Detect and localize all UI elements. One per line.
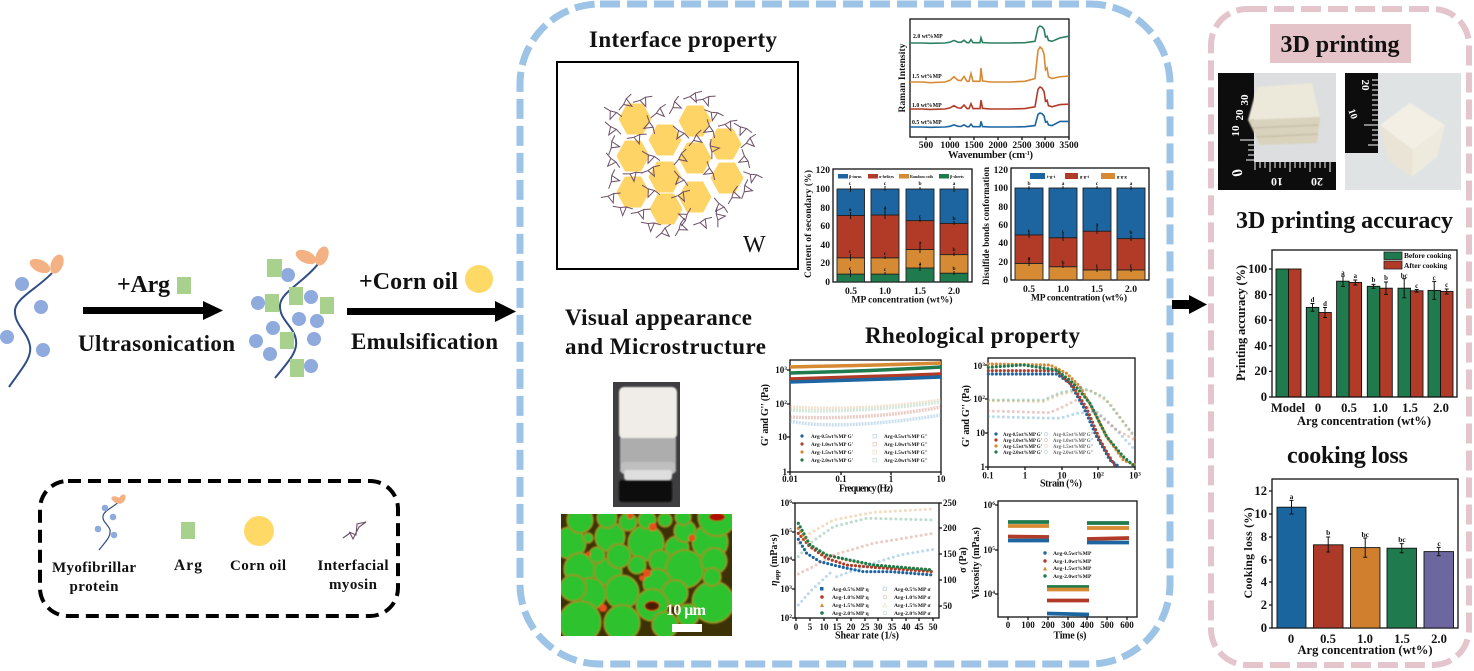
chart: Raman spectra: Raman Intensity: [898, 43, 908, 112]
chart: printing accuracy: 0.5: [1341, 401, 1357, 415]
chart: flow curve: 0: [794, 622, 799, 632]
chart: three-interval thixotropy: 5: [992, 546, 995, 552]
chart: flow curve: 10: [780, 613, 789, 623]
chart: Raman spectra: ): [1030, 150, 1034, 161]
chart: flow curve: 3: [789, 585, 792, 591]
chart: Raman spectra: 1500: [964, 140, 984, 151]
chart: frequency sweep: G' and G'' (Pa): [760, 384, 771, 446]
chart: secondary structure stacked bars: c: [849, 249, 852, 255]
chart: flow curve: 2: [789, 614, 792, 620]
chart: printing accuracy: 0: [1315, 401, 1321, 415]
chart: three-interval thixotropy: 6: [992, 501, 995, 507]
chart: disulfide bond stacked bars: 100: [994, 183, 1008, 194]
chart: three-interval thixotropy: 400: [1080, 620, 1094, 630]
chart: flow curve: Arg-1.5%MP η: [832, 603, 869, 609]
chart: strain sweep: 2: [1101, 472, 1104, 478]
chart: disulfide bond stacked bars: c: [1130, 263, 1133, 269]
chart: three-interval thixotropy: Time (s): [1054, 630, 1086, 642]
chart: flow curve: Arg-1.5%MP σ: [894, 603, 932, 609]
chart: Raman spectra: -1: [1025, 151, 1030, 157]
chart: flow curve: 10: [780, 498, 789, 508]
chart: printing accuracy: c: [1433, 275, 1436, 282]
step: add arginine with ultrasonication: +Arg: [117, 272, 170, 298]
legend: Arg: Arg: [174, 557, 202, 574]
protein with arginine: [249, 244, 334, 378]
chart: strain sweep: 3: [1138, 472, 1141, 478]
chart: frequency sweep: Arg-2.0wt%MP G': [811, 458, 854, 464]
chart: disulfide bond stacked bars: 0.5: [1023, 284, 1035, 295]
chart: Raman spectra: 2500: [1012, 140, 1032, 151]
heading: cooking loss: cooking loss: [1287, 443, 1408, 469]
chart: secondary structure stacked bars: Content of secondary (%): [803, 170, 814, 278]
chart: disulfide bond stacked bars: c: [1062, 229, 1065, 235]
chart: cooking loss: 1.5: [1394, 632, 1410, 646]
chart: secondary structure stacked bars: [803, 165, 972, 306]
chart: flow curve: 50: [928, 622, 938, 632]
chart: frequency sweep: 0.1: [835, 474, 847, 484]
chart: frequency sweep: Arg-1.0wt%MP G': [811, 442, 854, 448]
chart: printing accuracy: Arg concentration (wt%): [1297, 414, 1431, 428]
chart: secondary structure stacked bars: a: [884, 205, 887, 211]
chart: three-interval thixotropy: Arg-1.0wt%MP: [1053, 559, 1092, 565]
chart: frequency sweep: 10: [775, 365, 784, 375]
chart: disulfide bond stacked bars: 20: [998, 257, 1008, 268]
chart: three-interval thixotropy: Arg-0.5wt%MP: [1053, 551, 1092, 557]
chart: frequency sweep: 10: [775, 399, 784, 409]
chart: three-interval thixotropy: [971, 500, 1137, 642]
chart: printing accuracy: 40: [1254, 339, 1267, 353]
chart: three-interval thixotropy: 4: [992, 590, 995, 596]
step: add arginine with ultrasonication: [78, 272, 235, 356]
chart: flow curve: 25: [860, 622, 870, 632]
chart: secondary structure stacked bars: 20: [820, 258, 830, 269]
chart: disulfide bond stacked bars: 1.5: [1091, 284, 1103, 295]
chart: Raman spectra: 0.5 wt%MP: [912, 120, 942, 126]
chart: frequency sweep: 1: [889, 474, 894, 484]
chart: secondary structure stacked bars: β-sheets: [950, 174, 964, 179]
chart: flow curve: Arg-0.5%MP σ: [894, 587, 932, 593]
chart: secondary structure stacked bars: 60: [820, 221, 830, 232]
chart: cooking loss: Cooking loss (%): [1241, 508, 1255, 598]
chart: flow curve: Arg-2.0%MP η: [832, 611, 869, 617]
chart: frequency sweep: 10: [778, 432, 788, 442]
chart: cooking loss: 12: [1254, 484, 1267, 498]
arrow: to 3D printing panel: [1172, 295, 1207, 314]
chart: flow curve: σ (Pa): [958, 547, 969, 573]
chart: strain sweep: Arg-0.5wt%MP G': [1003, 433, 1042, 438]
chart: flow curve: 250: [943, 498, 957, 508]
photo: confocal micrograph: [561, 514, 732, 636]
chart: secondary structure stacked bars: b: [952, 247, 956, 253]
chart: disulfide bond stacked bars: a: [1130, 181, 1133, 187]
chart: printing accuracy: 0: [1261, 390, 1267, 404]
chart: printing accuracy: d: [1311, 297, 1315, 304]
chart: flow curve: 45: [914, 622, 924, 632]
chart: secondary structure stacked bars: 0: [825, 277, 830, 288]
chart: strain sweep: 10: [976, 428, 986, 438]
chart: flow curve: 10: [780, 527, 789, 537]
chart: printing accuracy: 1.0: [1372, 401, 1388, 415]
photo: printed cube 1: 10: [1230, 125, 1242, 136]
photo: printed cube 1: 20: [1311, 175, 1323, 189]
chart: secondary structure stacked bars: 40: [820, 240, 830, 251]
chart: strain sweep: 1: [980, 462, 986, 472]
chart: frequency sweep: Arg-1.5wt%MP G': [811, 450, 854, 456]
chart: frequency sweep: Arg-0.5wt%MP G': [811, 434, 854, 440]
chart: secondary structure stacked bars: c: [884, 267, 887, 273]
chart: disulfide bond stacked bars: 2.0: [1125, 284, 1137, 295]
chart: flow curve: η: [769, 580, 780, 586]
chart: printing accuracy: b: [1384, 275, 1388, 282]
chart: strain sweep: 0.1: [982, 470, 994, 480]
heading: 3D printing: 3D printing: [1280, 32, 1400, 58]
chart: Raman spectra: 2.0 wt%MP: [913, 34, 943, 40]
chart: frequency sweep: [760, 360, 946, 494]
chart: cooking loss: 1.0: [1357, 632, 1373, 646]
chart: secondary structure stacked bars: c: [919, 214, 922, 220]
chart: cooking loss: 0: [1288, 632, 1294, 646]
chart: strain sweep: 10: [1058, 470, 1067, 480]
chart: printing accuracy: 60: [1254, 313, 1267, 327]
chart: cooking loss: 2: [1261, 598, 1267, 612]
chart: strain sweep: 10: [973, 361, 982, 371]
chart: secondary structure stacked bars: c: [884, 251, 887, 257]
chart: strain sweep: Arg-1.0wt%MP G': [1003, 439, 1042, 444]
photo: printed cube 1: 20: [1234, 109, 1246, 120]
chart: secondary structure stacked bars: 80: [820, 203, 830, 214]
chart: printing accuracy: Printing accuracy (%): [1234, 265, 1248, 381]
panel: 3D printing (pink dashed): [1211, 9, 1469, 665]
chart: flow curve: 50: [943, 601, 952, 611]
chart: frequency sweep: Arg-2.0wt%MP G'': [884, 458, 928, 464]
chart: printing accuracy: b: [1372, 277, 1376, 284]
interface diagram: [557, 62, 798, 269]
chart: disulfide bond stacked bars: 40: [998, 238, 1008, 249]
chart: strain sweep: 10: [1129, 470, 1138, 480]
chart: strain sweep: G' and G'' (Pa): [961, 385, 972, 447]
chart: three-interval thixotropy: 0: [1006, 620, 1011, 630]
chart: disulfide bond stacked bars: g-g-t: [1080, 174, 1089, 179]
photo: emulsion vial: [613, 382, 680, 507]
chart: three-interval thixotropy: 10: [983, 500, 992, 510]
chart: disulfide bond stacked bars: b: [1061, 260, 1065, 266]
legend: myofibrillar protein: [52, 493, 136, 595]
chart: Raman spectra: 1.0 wt%MP: [912, 103, 942, 109]
chart: strain sweep: 3: [982, 362, 985, 368]
chart: cooking loss: 8: [1261, 530, 1267, 544]
chart: printing accuracy: 80: [1254, 288, 1267, 302]
chart: frequency sweep: 1: [782, 467, 788, 477]
photo: confocal micrograph: 10 µm: [666, 602, 707, 619]
chart: cooking loss: Arg concentration (wt%): [1298, 643, 1432, 657]
chart: cooking loss: bc: [1361, 530, 1370, 539]
chart: three-interval thixotropy: 10: [983, 589, 992, 599]
chart: printing accuracy: a: [1341, 270, 1345, 277]
chart: cooking loss: b: [1326, 528, 1330, 537]
chart: frequency sweep: Arg-0.5wt%MP G'': [884, 434, 928, 440]
chart: flow curve: Shear rate (1/s): [835, 630, 899, 642]
chart: secondary structure stacked bars: 1.0: [879, 286, 891, 297]
chart: printing accuracy: 100: [1248, 262, 1267, 276]
chart: flow curve: 200: [943, 523, 957, 533]
chart: secondary structure stacked bars: b: [952, 266, 956, 272]
chart: secondary structure stacked bars: MP concentration (wt%): [852, 294, 952, 306]
chart: Raman spectra: 2000: [988, 140, 1008, 151]
chart: secondary structure stacked bars: 120: [816, 165, 830, 176]
chart: flow curve: 150: [943, 549, 957, 559]
chart: flow curve: 10: [780, 584, 789, 594]
chart: flow curve: 35: [888, 622, 897, 632]
chart: Raman spectra: Wavenumber (cm: [948, 150, 1025, 161]
chart: secondary structure stacked bars: 100: [816, 184, 830, 195]
chart: flow curve: Arg-1.0%MP η: [832, 595, 869, 601]
photo: printed cube 2: 20: [1359, 80, 1371, 91]
chart: frequency sweep: 10: [936, 474, 946, 484]
chart: three-interval thixotropy: 300: [1061, 620, 1075, 630]
chart: secondary structure stacked bars: c: [849, 266, 852, 272]
chart: secondary structure stacked bars: 1.5: [914, 286, 926, 297]
chart: frequency sweep: Frequency (Hz): [839, 484, 893, 494]
chart: secondary structure stacked bars: a: [919, 261, 922, 267]
chart: flow curve: 10: [780, 555, 789, 565]
chart: three-interval thixotropy: 600: [1120, 620, 1134, 630]
chart: disulfide bond stacked bars: b: [1027, 181, 1031, 187]
chart: frequency sweep: 0.01: [782, 474, 798, 484]
legend: Arg: [174, 522, 202, 574]
photo: printed cube 1: 10: [1271, 175, 1283, 189]
chart: secondary structure stacked bars: b: [952, 216, 956, 222]
chart: printing accuracy: 1.5: [1402, 401, 1418, 415]
chart: flow curve: (mPa·s): [769, 534, 780, 570]
panel: characterization (blue dashed): [520, 4, 1170, 664]
chart: cooking loss: 0.5: [1320, 632, 1336, 646]
chart: Raman spectra: 1000: [940, 140, 960, 151]
step: add corn oil with emulsification: Emulsification: [351, 329, 498, 354]
legend: myofibrillar protein: Myofibrillar: [52, 560, 136, 576]
photo: printed cube 1: 30: [1239, 94, 1251, 106]
chart: Raman spectra: 1.5 wt%MP: [912, 74, 942, 80]
chart: flow curve: Arg-1.0%MP σ: [894, 595, 932, 601]
chart: disulfide bond stacked bars: [981, 165, 1149, 304]
chart: printing accuracy: 2.0: [1433, 401, 1449, 415]
chart: strain sweep: Arg-2.0wt%MP G'': [1053, 451, 1093, 456]
chart: flow curve: 30: [874, 622, 883, 632]
photo: printed cube 2: 10: [1345, 108, 1359, 121]
chart: Raman spectra: 500: [919, 140, 933, 151]
chart: secondary structure stacked bars: a: [919, 240, 922, 246]
legend: interfacial myosin: myosin: [329, 577, 378, 593]
chart: three-interval thixotropy: Arg-1.5wt%MP: [1053, 566, 1092, 572]
chart: flow curve: 5: [808, 622, 813, 632]
chart: flow curve: 4: [789, 556, 792, 562]
chart: secondary structure stacked bars: α-helices: [879, 174, 894, 179]
chart: secondary structure stacked bars: c: [884, 181, 887, 187]
chart: printing accuracy: bc: [1401, 273, 1408, 280]
heading: visual appearance and microstructure: [565, 305, 766, 359]
legend: interfacial myosin: [318, 522, 388, 593]
chart: secondary structure stacked bars: 0.5: [845, 286, 857, 297]
chart: frequency sweep: Arg-1.0wt%MP G'': [884, 442, 928, 448]
chart: Raman spectra: [898, 19, 1079, 161]
chart: disulfide bond stacked bars: a: [1096, 222, 1099, 228]
chart: strain sweep: Arg-1.5wt%MP G': [1003, 445, 1042, 450]
chart: flow curve: 10: [820, 622, 829, 632]
chart: printing accuracy: Before cooking: [1404, 251, 1452, 260]
chart: strain sweep: Arg-0.5wt%MP G'': [1053, 433, 1093, 438]
photo: printed cube 2: [1345, 73, 1461, 190]
chart: disulfide bond stacked bars: MP concentration (wt%): [1031, 292, 1127, 304]
chart: printing accuracy: c: [1445, 282, 1448, 289]
chart: strain sweep: 10: [973, 394, 982, 404]
chart: frequency sweep: Arg-1.5wt%MP G'': [884, 450, 928, 456]
chart: cooking loss: 0: [1261, 621, 1267, 635]
chart: three-interval thixotropy: 100: [1021, 620, 1035, 630]
chart: frequency sweep: 2: [784, 400, 787, 406]
chart: disulfide bond stacked bars: 60: [998, 220, 1008, 231]
step: add arginine with ultrasonication: Ultrasonication: [78, 331, 235, 356]
interface diagram: W: [743, 232, 766, 258]
chart: Raman spectra: 3000: [1035, 140, 1055, 151]
step: add corn oil with emulsification: +Corn oil: [359, 269, 458, 295]
chart: disulfide bond stacked bars: 80: [998, 202, 1008, 213]
protein before arginine: [0, 252, 66, 387]
chart: disulfide bond stacked bars: a: [1028, 256, 1031, 262]
chart: flow curve: [769, 498, 969, 642]
chart: strain sweep: Arg-2.0wt%MP G': [1003, 451, 1042, 456]
chart: printing accuracy: After cooking: [1404, 261, 1447, 270]
legend: corn oil: Corn oil: [230, 558, 286, 574]
chart: three-interval thixotropy: Arg-2.0wt%MP: [1053, 574, 1092, 580]
chart: frequency sweep: 3: [784, 366, 787, 372]
chart: flow curve: 6: [789, 499, 792, 505]
photo: printed cube 1: [1218, 73, 1336, 190]
chart: disulfide bond stacked bars: b: [1129, 230, 1133, 236]
chart: flow curve: 20: [846, 622, 856, 632]
chart: three-interval thixotropy: 200: [1041, 620, 1055, 630]
chart: cooking loss: 6: [1261, 553, 1267, 567]
chart: printing accuracy: Model: [1271, 401, 1306, 415]
chart: secondary structure stacked bars: a: [849, 207, 852, 213]
chart: strain sweep: 1: [1023, 470, 1028, 480]
heading: rheological property: Rheological property: [865, 323, 1080, 348]
chart: printing accuracy: [1234, 250, 1457, 428]
chart: disulfide bond stacked bars: 120: [994, 165, 1008, 176]
chart: disulfide bond stacked bars: 0: [1003, 275, 1008, 286]
chart: strain sweep: 2: [982, 395, 985, 401]
chart: strain sweep: Arg-1.0wt%MP G'': [1053, 439, 1093, 444]
chart: Raman spectra: 3500: [1059, 140, 1079, 151]
chart: three-interval thixotropy: 10: [983, 545, 992, 555]
heading: visual appearance and microstructure: Visual appearance: [565, 305, 752, 330]
chart: secondary structure stacked bars: c: [849, 181, 852, 187]
chart: flow curve: Arg-2.0%MP σ: [894, 611, 932, 617]
chart: printing accuracy: a: [1354, 273, 1358, 280]
chart: flow curve: 5: [789, 528, 792, 534]
chart: secondary structure stacked bars: β-turns: [849, 174, 862, 179]
chart: secondary structure stacked bars: b: [918, 181, 922, 187]
heading: interface property: Interface property: [589, 27, 778, 52]
chart: flow curve: app: [774, 570, 781, 580]
chart: flow curve: Arg-0.5%MP η: [832, 587, 869, 593]
chart: cooking loss: a: [1290, 492, 1294, 501]
chart: disulfide bond stacked bars: c: [1096, 181, 1099, 187]
chart: strain sweep: [961, 358, 1141, 490]
legend: interfacial myosin: Interfacial: [318, 558, 388, 574]
heading: visual appearance and microstructure: and Microstructure: [565, 334, 766, 359]
chart: disulfide bond stacked bars: a: [1062, 181, 1065, 187]
chart: printing accuracy: c: [1415, 283, 1418, 290]
legend: myofibrillar protein: protein: [70, 579, 119, 595]
legend box: [40, 481, 398, 616]
chart: flow curve: 100: [943, 575, 957, 585]
chart: cooking loss: 4: [1261, 575, 1268, 589]
chart: flow curve: 15: [832, 622, 842, 632]
chart: disulfide bond stacked bars: 1.0: [1057, 284, 1069, 295]
chart: disulfide bond stacked bars: c: [1096, 263, 1099, 269]
heading: 3D printing accuracy: 3D printing accuracy: [1236, 208, 1453, 234]
chart: secondary structure stacked bars: Random coils: [910, 174, 934, 179]
heading: 3D printing: [1270, 24, 1411, 63]
chart: printing accuracy: d: [1323, 301, 1327, 308]
chart: disulfide bond stacked bars: Disulfide bonds conformation: [981, 167, 991, 285]
chart: cooking loss: [1241, 479, 1458, 657]
chart: strain sweep: Strain (%): [1040, 478, 1082, 490]
chart: three-interval thixotropy: 500: [1100, 620, 1114, 630]
chart: disulfide bond stacked bars: g-g-g: [1117, 174, 1127, 179]
chart: printing accuracy: 20: [1254, 364, 1267, 378]
step: add corn oil with emulsification: [347, 265, 516, 354]
legend: corn oil: [230, 516, 286, 574]
chart: secondary structure stacked bars: 2.0: [948, 286, 960, 297]
chart: three-interval thixotropy: Viscosity (mPa.s): [971, 527, 982, 599]
chart: cooking loss: 10: [1254, 507, 1267, 521]
chart: secondary structure stacked bars: a: [953, 181, 956, 187]
photo: printed cube 1: 0: [1230, 168, 1247, 178]
chart: strain sweep: Arg-1.5wt%MP G'': [1053, 445, 1093, 450]
chart: cooking loss: 2.0: [1431, 632, 1447, 646]
chart: cooking loss: c: [1437, 539, 1441, 548]
chart: strain sweep: 10: [1092, 470, 1101, 480]
chart: cooking loss: bc: [1398, 535, 1406, 544]
chart: disulfide bond stacked bars: t-g-t: [1047, 174, 1056, 179]
chart: disulfide bond stacked bars: c: [1028, 228, 1031, 234]
chart: flow curve: 40: [902, 622, 911, 632]
